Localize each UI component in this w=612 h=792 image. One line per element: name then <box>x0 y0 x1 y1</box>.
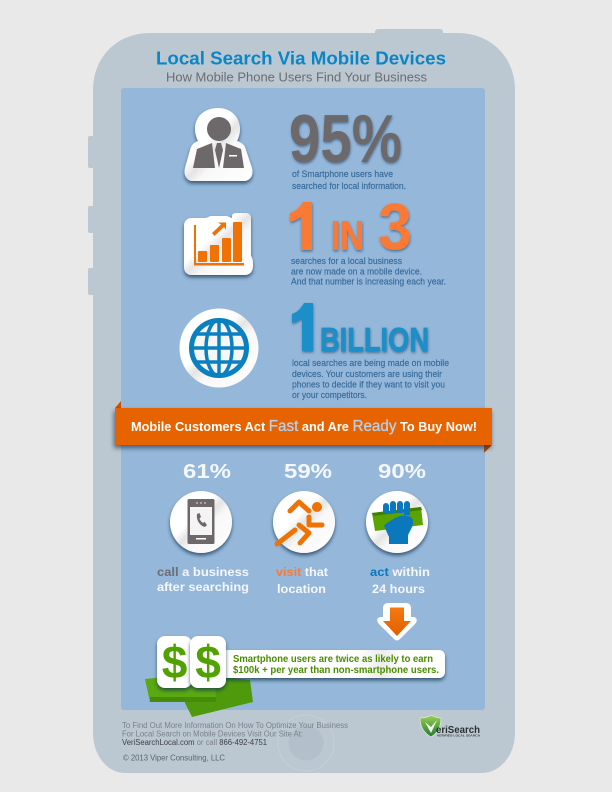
stat column: 59% visit: 59% <box>284 461 332 483</box>
stat: 1 in 3: 3 <box>378 190 412 264</box>
logo: VeriSearch: eriSearch <box>436 724 480 736</box>
footer text: For Local Search on Mobile Devices Visit Our Site At: <box>122 730 303 738</box>
stat column: 90% act: act within <box>370 567 430 579</box>
stat: 1 billion: or your competitors. <box>292 390 367 400</box>
stat: 95%: 95% <box>289 101 402 177</box>
stat: 1 in 3: And that number is increasing each year. <box>291 276 446 286</box>
stat column: 59% visit <box>273 461 335 596</box>
banner ribbon <box>115 401 492 453</box>
callout: earnings pill <box>220 650 445 678</box>
stat column: 90% act: 24 hours <box>372 584 425 596</box>
banner ribbon: Mobile Customers Act Fast and Are Ready To Buy Now! <box>131 418 477 435</box>
icon: runner in circle <box>273 491 335 553</box>
logo: VeriSearch <box>420 715 480 738</box>
logo: VeriSearch: VERIFIED LOCAL SEARCH <box>437 734 480 738</box>
phone screen panel <box>121 88 485 710</box>
icon: bar chart sticker <box>184 213 253 275</box>
stat: 1 billion: phones to decide if they want to visit you <box>292 380 445 390</box>
stat: 95%: of Smartphone users have <box>292 169 393 179</box>
icon: phone in circle <box>170 491 232 553</box>
icon: home button watermark <box>278 715 334 771</box>
stat: 1 billion: devices. Your customers are using their <box>292 369 442 379</box>
subtitle: How Mobile Phone Users Find Your Business <box>166 70 427 84</box>
title: Local Search Via Mobile Devices <box>156 48 446 68</box>
stat: 1 in 3 <box>290 190 446 286</box>
callout: earnings pill: Smartphone users are twice as likely to earn <box>233 654 433 665</box>
stat: 1 billion: BILLION <box>320 321 429 358</box>
stat column: 59% visit: visit that <box>276 567 328 579</box>
icon: globe sticker <box>180 308 258 388</box>
icon: dollar cards: $ <box>195 636 221 688</box>
stat: 1 in 3: IN <box>331 212 364 258</box>
stat column: 61% call: call a business <box>157 567 249 579</box>
stat column: 59% visit: location <box>277 584 326 596</box>
icon: dollar cards: $ <box>162 636 187 688</box>
stat: 95%: searched for local information. <box>292 181 406 191</box>
icon: person sticker <box>184 108 253 181</box>
footer text: To Find Out More Information On How To Optimize Your Business <box>122 721 348 730</box>
stat: 1 billion <box>292 303 449 400</box>
stat: 1 in 3: searches for a local business <box>291 256 402 266</box>
icon: cash stack <box>145 672 253 717</box>
stat: 1 billion: local searches are being made on mobile <box>292 358 449 368</box>
stat column: 61% call: 61% <box>183 461 231 483</box>
stat column: 61% call: after searching <box>157 582 249 594</box>
phone body <box>88 29 515 773</box>
stat column: 90% act: 90% <box>378 461 426 483</box>
copyright: © 2013 Viper Consulting, LLC <box>123 754 225 762</box>
stat: 1 in 3: are now made on a mobile device. <box>291 266 422 276</box>
footer text: VeriSearchLocal.com or call 866-492-4751 <box>122 738 268 747</box>
footer text <box>122 721 348 747</box>
icon: dollar cards <box>157 636 226 688</box>
stat column: 61% call <box>157 461 249 594</box>
icon: down arrow <box>377 603 417 640</box>
icon: fist with cash in circle <box>366 491 428 553</box>
stat column: 90% act <box>366 461 430 596</box>
callout: earnings pill: $100k + per year than non-smartphone users. <box>233 665 439 676</box>
